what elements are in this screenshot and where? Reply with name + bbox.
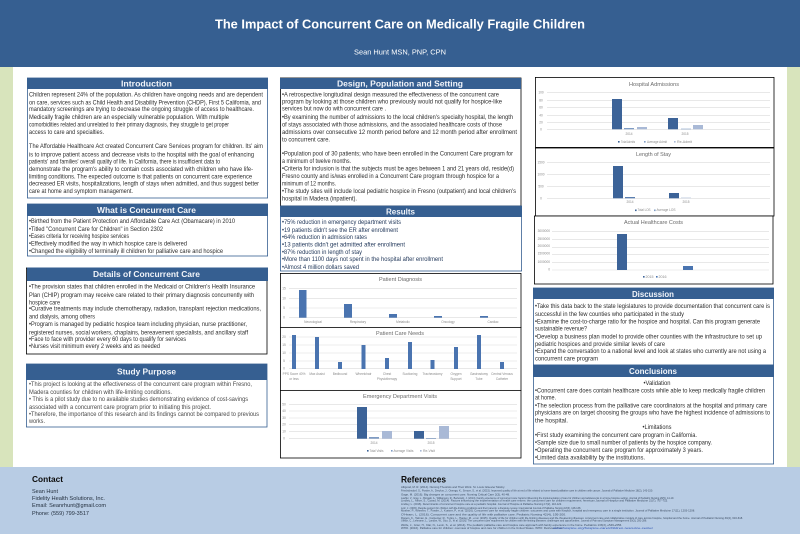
axis labels: emergency visits values: 30 — [282, 416, 286, 420]
axis labels: emergency visits values: 0 — [283, 437, 285, 441]
text: what is concurrent care list: •Effectively modified the way in which hospice care is delivered — [29, 241, 188, 248]
legend: emergency visits: Average Visits — [394, 449, 414, 453]
text: details list: •The provision states that children enrolled in the Medicaid or Children's Health Insurance — [29, 284, 256, 291]
text: reference list: Lindley, L. (2016). Determinants of concurrent hospice care at a pediatric hospital. Journal of Hospice & Palliative Nursing 17(2), 116-122. — [401, 503, 562, 506]
axis labels: costs values: 2500000 — [538, 237, 550, 241]
axis labels: costs values: 0 — [548, 268, 550, 272]
chart: hospital admissions — [535, 77, 774, 147]
legend: admissions: Re-Admit — [677, 140, 692, 144]
text: reference list — [401, 486, 743, 530]
bars: admissions — [612, 99, 703, 129]
axis labels: diagnosis categories — [304, 320, 499, 324]
text: design body: program by looking at those children who previously would not qualify for hospice-like — [282, 99, 503, 106]
text: reference list: WHO. (2016). Palliative care for children: overview of hospice and care for children in the United States. WHO: Retrieved from — [401, 527, 563, 530]
text: introduction body: patients' and families' overall quality of life. In California, there is insufficient data to — [29, 159, 220, 166]
text: reference list: Friedrichsdorf, S., Postier, A., Dreyfus, J., Osenga, K., Sencer, S., et al. (2015). Improved quality of life at end of life related to home-based palliative care in children with cancer. Journal of Palliative Medicine 18(2), 143-150. — [401, 490, 653, 492]
panel: design, population and setting — [280, 78, 521, 206]
text: conclusions body: •Validation — [644, 380, 671, 387]
panel: details of concurrent care — [26, 268, 268, 354]
axis labels: care needs values: 20 — [282, 335, 286, 339]
axis labels: costs values: 1000000 — [538, 260, 550, 264]
text: reference list: www.hospice.org/hospice-care/children-resource-center — [553, 527, 653, 530]
text: reference list: Rogers, K., Tatman, E., Carpenter, R., Turley, L., Hanley, M., et al. (2015). Quality of life for children with life-limiting diseases and life-threatening illnesses: concurrent care and collaborative models of care across hospice, hospital and the home. Journal of Pediatric Nursing 30(4), 616-618. — [401, 517, 743, 520]
text: reference list: Lauffer, V., Gray, L., Borgatti, A., Williamson, R., Berkowitz, J. (2014). Family experience of concurrent care: factors influencing the implementation of care for children and adolescents in a home hospice setting. Journal of Pediatric Nursing 29(5), 14-19. — [401, 497, 674, 500]
text: discussion list — [535, 303, 770, 362]
axis labels: length of stay years: 2015 — [682, 200, 690, 204]
text: results list: •75% reduction in emergency department visits — [282, 219, 401, 226]
legend: length of stay: Total LOS — [638, 208, 650, 212]
axis labels: length of stay values: 0 — [540, 196, 542, 200]
axis labels: patient diagnosis values: 15 — [282, 286, 286, 290]
axis labels: care needs categories: Bedbound — [333, 372, 347, 376]
text: conclusions body: •First study examining the concurrent care program in California. — [535, 432, 697, 439]
text: conclusions body: physicians are on target choosing the groups who have the highest incidence of admissions to — [535, 410, 770, 417]
text: design body: services but now do with concurrent care . — [282, 106, 386, 113]
heading: what is concurrent care: What is Concurrent Care — [97, 205, 196, 215]
chart title: emergency department visits: Emergency Department Visits — [363, 394, 437, 400]
text: discussion list: •Develop a business plan model to provide other counties with the infrastructure to set up — [535, 333, 763, 340]
bars: costs — [617, 234, 693, 270]
axis labels: diagnosis categories: Respiratory — [350, 320, 367, 324]
legend: emergency visits: Total Visits — [370, 449, 384, 453]
bars: length of stay — [613, 166, 691, 198]
text: details list: registered nurses, social workers, chaplains, bereavement specialists, and ancillary staff — [29, 330, 248, 337]
legend: costs — [643, 275, 667, 279]
text: contact details — [32, 489, 106, 517]
text: study purpose body: Madera counties for children with life-limiting conditions. — [29, 389, 172, 396]
references block — [401, 474, 743, 530]
axis labels: emergency visits values: 40 — [282, 409, 286, 413]
axis labels: diagnosis categories: Metabolic — [396, 320, 410, 324]
axis labels: care needs categories: PPS Score 40% — [283, 372, 306, 376]
heading: conclusions: Conclusions — [629, 366, 677, 376]
text: contact details: Phone: (559) 799-3517 — [32, 511, 89, 517]
text: what is concurrent care list: •Titled "Concurrent Care for Children" in Section 2302 — [29, 226, 164, 233]
text: discussion list: pediatric hospices and provide similar levels of care — [535, 341, 666, 348]
axis labels: patient diagnosis values — [282, 286, 286, 320]
text: introduction body: is to improve patient access and decrease visits to the hospital with the goal of enhancing — [29, 151, 255, 158]
text: details list: •Face to face with provider every 60 days to qualify for services — [29, 336, 186, 343]
text: conclusions body: •Sample size due to small number of patients by the hospice company. — [535, 440, 712, 447]
text: reference list: Lotz, J. (2015). Respite support for children with life-limiting conditions and their parents: a literature review. International Journal of Palliative Nursing 18(3), 128-138. — [401, 507, 581, 510]
text: what is concurrent care list: •Changed the eligibility of terminally ill children for palliative care and hospice — [29, 248, 224, 255]
text: discussion list: •Expand the conversation to a national level and look at states who currently are not using a — [535, 348, 767, 355]
text: introduction body: The Affordable Healthcare Act created Concurrent Care Services program for children. Its' aim — [29, 143, 263, 150]
text: introduction body: mandatory screenings are trying to decrease the ongoing struggle of access to healthcare. — [29, 106, 254, 113]
text: study purpose body: •This project is looking at the effectiveness of the concurrent care program within Fresno, — [29, 381, 252, 388]
text: design body: to concurrent care. — [282, 136, 330, 143]
axis labels: admissions values: 80 — [539, 98, 543, 102]
text: discussion list: sustainable revenue? — [535, 326, 587, 333]
text: results list: •64% reduction in admission rates — [282, 234, 367, 241]
axis labels: patient diagnosis values: 0 — [283, 316, 285, 320]
chart: patient diagnosis — [280, 273, 521, 327]
text: reference list: Alligood, M. R. (2014). Nursing Theorists and Their Work. St. Louis: Elsevier Mosby. — [401, 486, 505, 489]
title: The Impact of Concurrent Care on Medically Fragile Children — [215, 16, 585, 32]
text: details list: and dialysis, among others — [29, 314, 95, 321]
text: reference list: Lindley, L., Mixer, S., Cozad, M. (2014). Factors influencing the implementation of health care reform: the concurrent care for children requirement. American Journal of Hospice and Palliative Medicine 31(7), 707-715. — [401, 500, 668, 502]
legend: costs: 2015 — [646, 275, 654, 279]
bars: care needs — [292, 335, 504, 369]
text: details list — [29, 284, 261, 350]
text: design body: •A retrospective longitudinal design measured the effectiveness of the concurrent care — [282, 92, 500, 99]
header banner — [0, 0, 800, 67]
chart title: patient care needs: Patient Care Needs — [376, 331, 424, 337]
axis labels: care needs categories: Wheelchair — [356, 372, 372, 376]
text: conclusions body: •Concurrent care does contain healthcare costs while able to keep medically fragile children — [535, 387, 766, 394]
legend: length of stay: Average LOS — [656, 208, 676, 212]
axis labels: care needs categories: Tube — [475, 377, 483, 381]
axis labels: care needs categories: Oxygen — [450, 372, 462, 376]
panel: conclusions — [533, 365, 774, 464]
legend: admissions: Average Admit — [647, 140, 667, 144]
heading: introduction: Introduction — [121, 78, 172, 88]
text: study purpose body — [28, 381, 259, 425]
footer band — [0, 467, 800, 534]
axis labels: length of stay values: 1000 — [537, 172, 545, 176]
text: results list: •19 patients didn't see the ER after enrollment — [282, 227, 398, 234]
text: reference list: Mosher, P., Wheeler, T., Fowler, J., Kurtzer, P., et al. (2016). Concurrent care for medically fragile children: outcomes and costs with hospice, hospital and emergency care in a single institution. Journal of Palliative Medicine 17(11), 1203-1208. — [401, 510, 695, 512]
author: Sean Hunt MSN, PNP, CPN — [354, 48, 446, 56]
axis labels: emergency visits values: 50 — [282, 402, 286, 406]
chart title: actual healthcare costs: Actual Healthcare Costs — [624, 220, 683, 226]
text: details list: •Nurses visit minimum every 2 weeks and as needed — [29, 343, 160, 350]
axis labels: costs values: 2000000 — [538, 244, 550, 248]
axis labels: emergency visits years: 2014 — [370, 441, 378, 445]
heading: details of concurrent care: Details of Concurrent Care — [93, 269, 200, 279]
text: what is concurrent care list — [29, 218, 236, 255]
bars: emergency visits — [357, 407, 449, 439]
text: results list: •13 patients didn't get admitted after enrollment — [282, 241, 405, 248]
chart title: patient diagnosis: Patient Diagnosis — [379, 277, 422, 283]
axis labels: costs values — [538, 229, 550, 272]
panel: study purpose — [26, 364, 267, 427]
text: reference list: Wolfe, J., Grier, H., Klar, N., Levin, S., et al. (2014). The pediatric palliative care and hospice care approach with family experience in the home. Pediatrics 133(3), e549-e556. — [401, 524, 622, 527]
text: discussion list: •Take this data back to the state legislatures to provide documentation that concurrent care is — [535, 303, 770, 310]
chart: actual healthcare costs — [534, 216, 773, 284]
axis labels: patient diagnosis values: 10 — [282, 296, 286, 300]
axis labels: length of stay values: 500 — [538, 184, 544, 188]
axis labels: admissions values: 0 — [540, 127, 542, 131]
text: conclusions body: •Operating the concurrent care program for approximately 3 years. — [535, 447, 703, 454]
axis labels: admissions values — [538, 90, 544, 131]
panel: introduction — [27, 78, 268, 198]
text: details list: hospice care — [29, 299, 60, 306]
text: introduction body: access to care and specialties. — [29, 129, 104, 136]
text: details list: Plan (CHIP) program may receive care related to their primary diagnosis concurrently with — [29, 292, 254, 299]
text: results list — [282, 219, 443, 271]
axis labels: admissions years: 2015 — [681, 132, 689, 136]
contact block — [32, 474, 106, 517]
heading: study purpose: Study Purpose — [117, 366, 176, 376]
text: what is concurrent care list: •Eases criteria for receiving hospice services — [29, 233, 129, 240]
axis labels: care needs categories: Central Venous — [491, 372, 513, 376]
text: introduction body: Medically fragile children are an especially vulnerable population. With multiple — [29, 114, 230, 121]
legend: length of stay — [635, 208, 676, 212]
text: contact details: Fidelity Health Solutions, Inc. — [32, 496, 105, 502]
axis labels: admissions values: 20 — [539, 120, 543, 124]
text: what is concurrent care list: •Birthed from the Patient Protection and Affordable Care Act (Obamacare) in 2010 — [29, 218, 236, 225]
chart title: length of stay: Length of Stay — [636, 152, 671, 158]
axis labels: care needs categories: Max Assist — [309, 372, 325, 376]
axis labels: care needs categories: or less — [289, 377, 299, 381]
axis labels: care needs values — [282, 335, 286, 371]
axis labels: emergency visits years: 2015 — [427, 441, 435, 445]
axis labels: emergency visits values: 10 — [282, 430, 286, 434]
axis labels: care needs categories: Catheter — [496, 377, 509, 381]
axis labels: diagnosis categories: Cardiac — [488, 320, 499, 324]
legend: admissions: Total Admits — [621, 140, 635, 144]
axis labels: emergency visits values: 20 — [282, 423, 286, 427]
axis labels: care needs categories: Physiotherapy — [377, 377, 398, 381]
chart: patient care needs — [280, 327, 521, 390]
text: design body: •Criteria for inclusion is that the subjects must be ages between 1 and 21 years old, reside(d) — [282, 166, 514, 173]
text: design body: of stays associated with those admissions, and the associated healthcare costs of those — [282, 122, 503, 129]
panel: what is concurrent care — [27, 204, 268, 256]
text: reference list: Ullrich, C., Lehmann, L., London, W., Guo, D., et al. (2016). The concurrent care requirement for children with life-limiting diseases: challenges and opportunities. Journal of Pain and Symptom Management 50(3), 281-286. — [401, 520, 647, 522]
text: discussion list: •Examine the cost-to-charge ratio for the hospice and hospital. Can this program generate — [535, 318, 761, 325]
text: introduction body: decreased ER visits, hospitalizations, length of stays when admitted, and thus suggest better — [29, 180, 259, 187]
heading: contact: Contact — [32, 474, 63, 484]
text: design body: hospital in Madera (inpatient). — [282, 195, 357, 202]
text: conclusions body — [535, 380, 770, 461]
axis labels: care needs values: 0 — [283, 367, 285, 371]
chart: length of stay — [535, 148, 774, 216]
legend: admissions — [618, 140, 692, 144]
axis labels: care needs categories: Support — [450, 377, 462, 381]
axis labels: care needs values: 10 — [282, 351, 286, 355]
legend: costs: 2016 — [658, 275, 667, 279]
axis labels: care needs categories: Gastrostomy — [470, 372, 488, 376]
bars: patient diagnosis — [299, 290, 488, 318]
axis labels: costs values: 3000000 — [538, 229, 550, 233]
text: contact details: Email: Seanrhunt@gmail.com — [32, 503, 106, 509]
text: details list: •Program is managed by pediatric hospice team including physician, nurse practitioner, — [29, 321, 247, 328]
text: conclusions body: at home. — [535, 395, 556, 402]
text: design body: admissions over consecutive 12 month period before and 12 month period after enrollment — [282, 129, 517, 136]
text: design body: •Population pool of 30 patients; who have been enrolled in the Concurrent Care program for — [282, 150, 513, 157]
text: conclusions body: the hospital. — [535, 417, 568, 424]
legend: emergency visits: Re-Visit — [423, 449, 435, 453]
text: results list: •Almost 4 million dollars saved — [282, 264, 360, 271]
axis labels: care needs categories: Tracheostomy — [422, 372, 443, 376]
text: design body: minimum of 12 months. — [282, 180, 336, 187]
chart: emergency department visits — [280, 390, 521, 458]
text: introduction body: comorbidities related and unrelated to their primary diagnosis, they struggle to get proper — [29, 122, 229, 129]
text: introduction body: limiting conditions. The expected outcome is that patients on concurrent care experience — [29, 173, 253, 180]
text: details list: •Curative treatments may include chemotherapy, radiation, transplant rejection medications, — [29, 306, 261, 313]
text: contact details: Sean Hunt — [32, 489, 58, 495]
axis labels: diagnosis categories: Oncology — [441, 320, 455, 324]
text: design body: •The study sites will include local pediatric hospice in Fresno (outpatient) and local children's — [282, 188, 516, 195]
text: study purpose body: associated with a concurrent care program prior to initiating this project. — [29, 404, 211, 411]
axis labels: length of stay values — [537, 160, 545, 200]
text: results list: •More than 1100 days not spent in the hospital after enrollment — [282, 256, 443, 263]
axis labels: care needs categories — [283, 372, 513, 381]
axis labels: emergency visits years — [370, 441, 435, 445]
text: study purpose body: • This is a pilot study due to no available studies demonstrating evidence of cost-savings — [29, 396, 248, 403]
text: reference list: O'Hearn, L. (2016). Concurrent care and the quality of life with palliative care. Pediatric Nursing 42(4), 195-200. — [401, 514, 566, 516]
axis labels: admissions years: 2014 — [625, 132, 633, 136]
chart title: hospital admissions: Hospital Admissions — [629, 82, 679, 88]
axis labels: length of stay years — [626, 200, 690, 204]
axis labels: care needs values: 5 — [283, 359, 285, 363]
panel: discussion — [533, 288, 774, 365]
text: introduction body: care at home and symptom management. — [29, 188, 133, 195]
axis labels: admissions values: 40 — [539, 113, 543, 117]
text: introduction body — [29, 92, 263, 195]
text: discussion list: concurrent care program — [535, 355, 598, 362]
axis labels: care needs values: 15 — [282, 343, 286, 347]
legend: emergency visits — [367, 449, 435, 453]
text: reference list: Gage, M. (2016). Big changes on concurrent care. Nursing Critical Care 2(3), 40-48. — [401, 494, 510, 496]
heading: references: References — [401, 474, 446, 486]
text: results list: •87% reduction in length of stay — [282, 249, 363, 256]
axis labels: admissions values: 60 — [539, 105, 543, 109]
axis labels: length of stay years: 2014 — [626, 200, 634, 204]
text: design body — [282, 92, 517, 202]
axis labels: diagnosis categories: Neurological — [304, 320, 322, 324]
axis labels: admissions years — [625, 132, 689, 136]
text: conclusions body: •Limitations — [642, 424, 672, 431]
axis labels: admissions values: 100 — [538, 90, 544, 94]
text: design body: Fresno county and is/was enrolled in a Concurrent Care program through hospice for a — [282, 173, 499, 180]
text: introduction body: demonstrate the program's ability to contain costs associated with children who have life- — [29, 166, 253, 173]
axis labels: care needs categories: Suctioning — [403, 372, 418, 376]
heading: discussion: Discussion — [632, 289, 674, 299]
text: introduction body: Children represent 24% of the population. As children have ongoing needs and are dependent — [29, 92, 263, 99]
axis labels: costs values: 1500000 — [538, 252, 550, 256]
axis labels: care needs categories: Chest — [383, 372, 391, 376]
text: introduction body: on care, services such as Child Health and Disability Prevention (CHDP), First 5 California, and — [29, 99, 261, 106]
text: design body: a minimum of twelve months. — [282, 158, 351, 165]
axis labels: length of stay values: 1500 — [537, 160, 545, 164]
text: discussion list: successful in the few counties who participated in the study — [535, 311, 685, 318]
heading: design, population and setting: Design, Population and Setting — [337, 78, 463, 88]
text: study purpose body: •Therefore, the importance of this research and its findings cannot be compared to previous — [29, 411, 259, 418]
panel: results — [280, 206, 522, 271]
axis labels: patient diagnosis values: 5 — [283, 306, 285, 310]
heading: results: Results — [386, 206, 415, 216]
text: conclusions body: •The selection process from the palliative care coordinators at the hospital and primary care — [535, 402, 768, 409]
text: design body: •By examining the number of admissions to the local children's specialty hospital, the length — [282, 114, 514, 121]
axis labels: emergency visits values — [282, 402, 286, 441]
text: conclusions body: •Limited data availability by the institutions. — [535, 454, 645, 461]
text: study purpose body: works. — [28, 418, 45, 425]
